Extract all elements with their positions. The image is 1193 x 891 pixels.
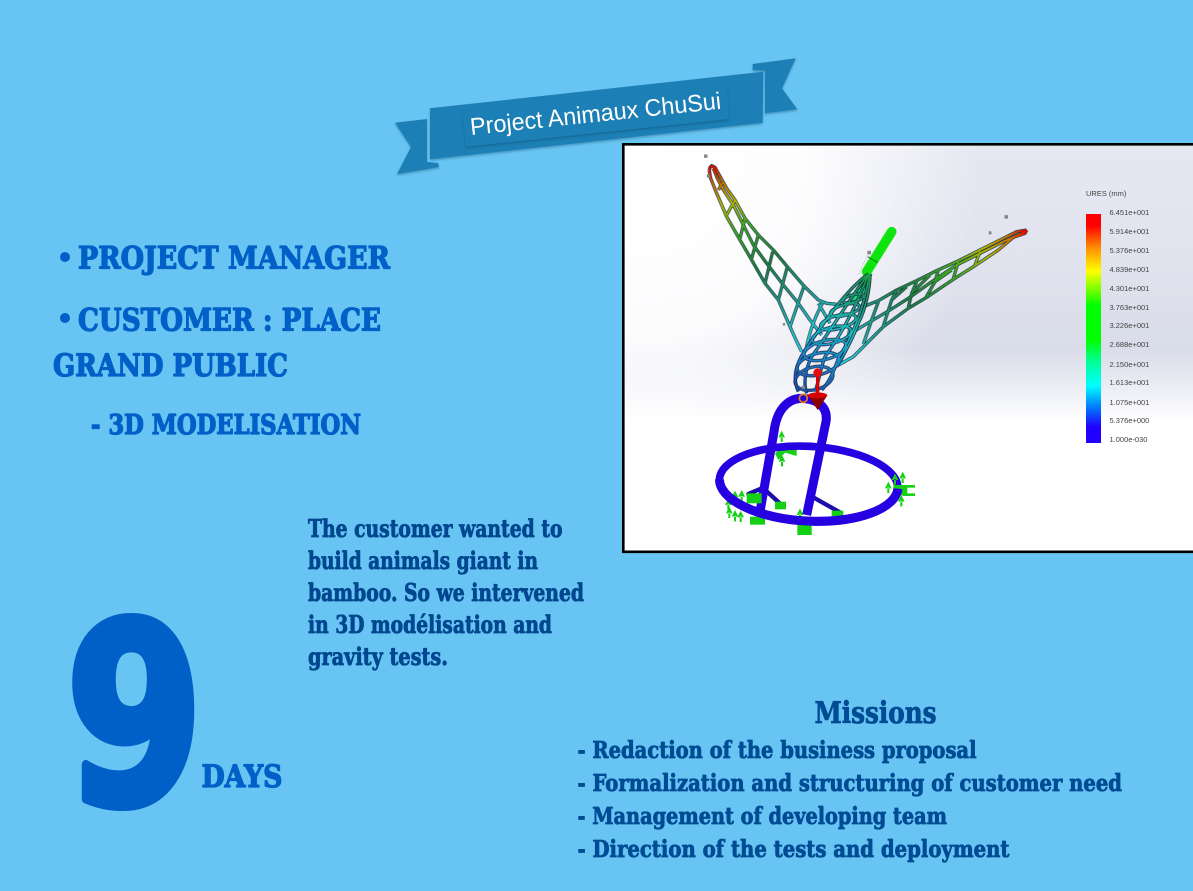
- project description: build animals giant in: [308, 546, 538, 575]
- mission items: - Management of developing team: [578, 803, 947, 830]
- project description: [308, 514, 584, 671]
- dragonfly body cage: [792, 274, 870, 394]
- duration: 9 days: [66, 572, 282, 861]
- customer line one: CUSTOMER : PLACE: [78, 302, 381, 338]
- red load arrow: [808, 368, 827, 410]
- picture background and frame: [622, 143, 1193, 553]
- legend values: 1.000e-030: [1110, 435, 1147, 444]
- project description: The customer wanted to: [308, 514, 562, 543]
- legend values: 1.075e+001: [1110, 398, 1149, 407]
- legend values: 5.914e+001: [1110, 227, 1149, 236]
- dragonfly tail: [851, 232, 892, 304]
- project description: gravity tests.: [308, 642, 448, 671]
- legend title: URES (mm): [1086, 189, 1127, 198]
- project description: in 3D modélisation and: [308, 610, 552, 639]
- ribbon left tail: [395, 119, 439, 174]
- days label: DAYS: [202, 759, 282, 795]
- ribbon label plate: [463, 86, 729, 147]
- legend values: 2.150e+001: [1110, 360, 1149, 369]
- large number nine: 9: [66, 572, 203, 861]
- legend values: 1.613e+001: [1110, 378, 1149, 387]
- legend values: 5.376e+001: [1110, 246, 1149, 255]
- mission items: [578, 737, 1122, 863]
- legend values: 5.376e+000: [1110, 416, 1149, 425]
- ribbon title text: Project Animaux ChuSui: [469, 88, 722, 141]
- mission items: - Redaction of the business proposal: [578, 737, 977, 764]
- legend values: 3.763e+001: [1110, 303, 1149, 312]
- orange selection ring: [799, 394, 807, 402]
- dragonfly left wing: [709, 166, 837, 352]
- support arrows back: [775, 431, 797, 466]
- role heading: PROJECT MANAGER: [78, 240, 390, 276]
- customer line two: GRAND PUBLIC: [53, 348, 288, 384]
- legend colour bar: [1086, 214, 1101, 443]
- dragonfly model: [704, 155, 1027, 394]
- role and customer list: [53, 240, 390, 441]
- ribbon right tail: [753, 58, 797, 113]
- project description: bamboo. So we intervened: [308, 578, 584, 607]
- model reference marks: [704, 155, 1008, 389]
- mission items: - Direction of the tests and deployment: [578, 836, 1010, 863]
- legend values: 4.301e+001: [1110, 284, 1149, 293]
- legend values: 4.839e+001: [1110, 265, 1149, 274]
- base feet: [748, 488, 840, 512]
- base ring: [717, 442, 900, 526]
- arch stand: [760, 398, 826, 515]
- support arrows front: [725, 472, 915, 535]
- legend values: 6.451e+001: [1110, 208, 1149, 217]
- stand and load arrow: [717, 368, 915, 535]
- legend values: [1110, 208, 1149, 444]
- legend values: 2.688e+001: [1110, 340, 1149, 349]
- bullet: project manager: [60, 252, 70, 262]
- missions list: [578, 696, 1122, 863]
- title ribbon: [395, 58, 797, 174]
- bullet: customer: [60, 313, 70, 323]
- task line: - 3D MODELISATION: [91, 410, 361, 441]
- dragonfly right wing: [838, 230, 1027, 365]
- simulation picture panel: [622, 143, 1193, 553]
- missions heading: Missions: [814, 696, 936, 731]
- ribbon main band: [430, 72, 763, 159]
- base ring front: [719, 479, 898, 521]
- legend values: 3.226e+001: [1110, 321, 1149, 330]
- colour legend: [1086, 189, 1149, 444]
